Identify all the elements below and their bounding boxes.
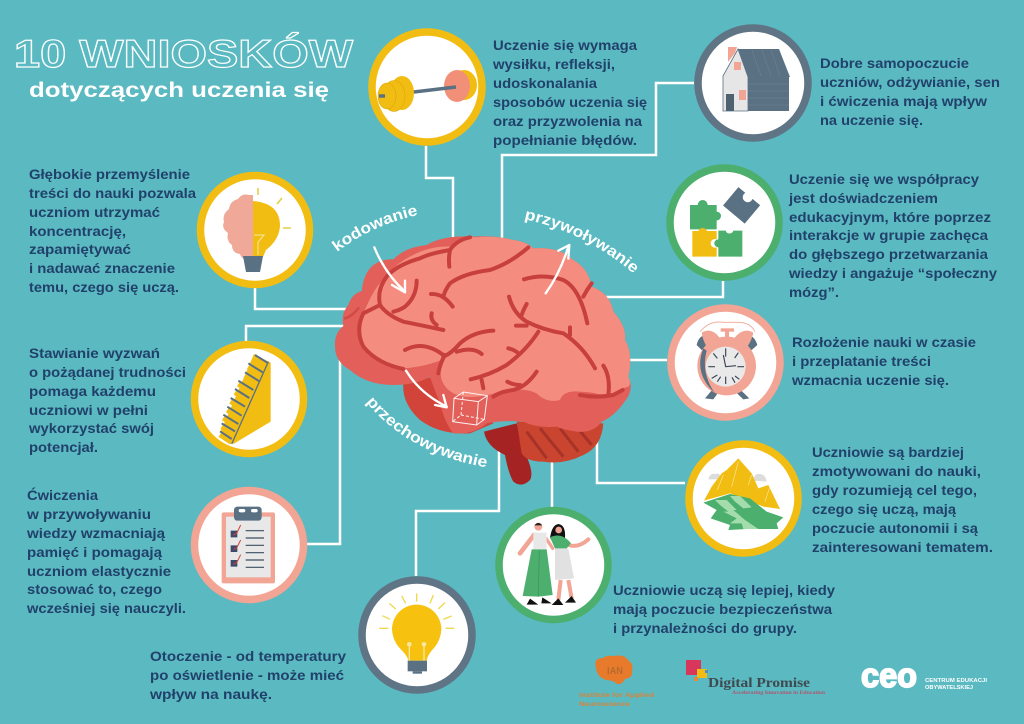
- label: kodowanie: kodowanie: [331, 206, 417, 252]
- text: retrieval practice: uczniom elastycznie: [27, 563, 171, 579]
- text: retrieval practice: pamięć i pomagają: [27, 544, 162, 560]
- text: collaboration: interakcje w grupie zachęca: [789, 227, 988, 243]
- text: environment: po oświetlenie - może mieć: [150, 667, 344, 683]
- text: desirable difficulty: pomaga każdemu: [29, 383, 156, 399]
- text: environment: Otoczenie - od temperatury: [150, 648, 346, 664]
- icon: light bulb: [362, 580, 472, 690]
- text: desirable difficulty: Stawianie wyzwań: [29, 345, 160, 361]
- text: belonging: [613, 582, 835, 636]
- text: belonging: mają poczucie bezpieczeństwa: [613, 601, 832, 617]
- text: spacing: Rozłożenie nauki w czasie: [792, 334, 976, 350]
- arrow: encoding: [374, 247, 405, 292]
- logo: Institute for Applied Neuroscience: [579, 656, 654, 708]
- arrow: retrieval: [546, 245, 569, 293]
- text: deep thinking: zapamiętywać: [29, 241, 131, 257]
- icon: puzzle: [670, 168, 779, 277]
- text: retrieval practice: wcześniej się nauczyli.: [26, 600, 186, 616]
- text: collaboration: wiedzy i angażuje “społeczny: [788, 265, 997, 281]
- icon: house: [698, 28, 808, 138]
- text: retrieval practice: w przywoływaniu: [26, 506, 151, 522]
- cerebellum: [517, 422, 603, 462]
- text: desirable difficulty: potencjał.: [29, 439, 98, 455]
- text: wellbeing: i ćwiczenia mają wpływ: [820, 93, 987, 109]
- text: wellbeing: na uczenie się.: [820, 112, 923, 128]
- text: deep thinking: i nadawać znaczenie: [29, 260, 175, 276]
- text: belonging: i przynależności do grupy.: [613, 620, 797, 636]
- label: przechowywanie: przechowywanie: [364, 398, 487, 467]
- text: wellbeing: uczniów, odżywianie, sen: [820, 74, 1000, 90]
- text: deep thinking: treści do nauki pozwala: [29, 185, 196, 201]
- logo: CEO: ceo: [861, 657, 917, 695]
- text: wellbeing: Dobre samopoczucie: [820, 55, 969, 71]
- icon: wire cube: [453, 392, 487, 425]
- text: collaboration: mózg”.: [789, 284, 839, 300]
- text: retrieval practice: [26, 486, 186, 616]
- brain illustration: [335, 236, 631, 485]
- title: [14, 32, 353, 102]
- text: spacing: i przeplatanie treści: [792, 353, 931, 369]
- text: belonging: Uczniowie uczą się lepiej, kiedy: [613, 582, 835, 598]
- text: collaboration: do głębszego przetwarzania: [789, 246, 988, 262]
- brain stem: [484, 423, 531, 485]
- text: deep thinking: koncentrację,: [29, 223, 126, 239]
- brain outer layer: [335, 236, 631, 434]
- text: motivation: czego się uczą, mają: [812, 501, 956, 517]
- text: deep thinking: temu, czego się uczą.: [29, 279, 179, 295]
- text: motivation: [812, 444, 993, 555]
- arrow: storage: [406, 371, 447, 407]
- brain folds: [345, 237, 623, 397]
- label: przywoływanie: przywoływanie: [524, 211, 638, 272]
- text: environment: wpływ na naukę.: [149, 686, 272, 702]
- text: environment: [149, 648, 346, 702]
- icon: mountains: [689, 444, 798, 553]
- connector lines: [246, 83, 723, 576]
- text: deep thinking: [29, 166, 196, 295]
- text: deep thinking: uczniom utrzymać: [29, 204, 160, 220]
- text: desirable difficulty: [28, 345, 186, 455]
- logo: CEO: [861, 657, 987, 695]
- text: collaboration: edukacyjnym, które poprzez: [789, 209, 991, 225]
- logo: Institute for Applied Neuroscience: Institute for Applied: [579, 693, 654, 699]
- text: retrieval practice: wiedzy wzmacniają: [26, 525, 165, 541]
- brain light layer: [360, 237, 630, 401]
- icon: stairs: [194, 344, 304, 454]
- temporal lobe shadow: [403, 370, 493, 433]
- text: motivation: zmotywowani do nauki,: [812, 463, 981, 479]
- text: motivation: gdy rozumieją cel tego,: [812, 482, 977, 498]
- icon: clipboard: [194, 490, 304, 600]
- text: retrieval practice: stosować to, czego: [27, 581, 162, 597]
- icon: barbell: [372, 32, 482, 142]
- logo: Digital Promise: [686, 660, 825, 696]
- text: effort: wysiłku, refleksji,: [492, 56, 615, 72]
- text: effort: udoskonalania: [493, 75, 597, 91]
- icon: people: [499, 510, 608, 620]
- logo: CEO: OBYWATELSKIEJ: [925, 685, 973, 691]
- text: motivation: poczucie autonomii i są: [812, 520, 978, 536]
- icon: brain bulb: [200, 176, 310, 284]
- text: effort: sposobów uczenia się: [493, 94, 647, 110]
- text: spacing: [791, 334, 976, 388]
- text: effort: popełnianie błędów.: [493, 132, 637, 148]
- text: spacing: wzmacnia uczenie się.: [791, 372, 949, 388]
- text: effort: [492, 37, 647, 148]
- icon: alarm clock: [671, 308, 780, 417]
- logo: Digital Promise: Digital Promise: [708, 676, 810, 691]
- text: motivation: Uczniowie są bardziej: [812, 444, 964, 460]
- text: effort: oraz przyzwolenia na: [493, 113, 642, 129]
- text: collaboration: Uczenie się we współpracy: [789, 171, 979, 187]
- text: wellbeing: [820, 55, 1000, 128]
- text: motivation: zainteresowani tematem.: [812, 539, 993, 555]
- text: effort: Uczenie się wymaga: [493, 37, 637, 53]
- logo: Institute for Applied Neuroscience: Neuroscience: [579, 702, 631, 708]
- title: dotyczących uczenia się: [29, 79, 329, 102]
- logo: Digital Promise: Accelerating Innovation in Education: [732, 691, 825, 696]
- logo: CEO: CENTRUM EDUKACJI: [925, 678, 987, 684]
- text: desirable difficulty: wykorzystać swój: [28, 420, 154, 436]
- logo: Institute for Applied Neuroscience: IAN: [607, 666, 623, 677]
- text: collaboration: jest doświadczeniem: [788, 190, 938, 206]
- text: retrieval practice: Ćwiczenia: [27, 486, 98, 503]
- title: 10 WNIOSKÓW: [14, 32, 353, 76]
- text: desirable difficulty: uczniowi w pełni: [29, 402, 148, 418]
- text: deep thinking: Głębokie przemyślenie: [29, 166, 190, 182]
- text: collaboration: [788, 171, 997, 300]
- text: desirable difficulty: o pożądanej trudności: [29, 364, 186, 380]
